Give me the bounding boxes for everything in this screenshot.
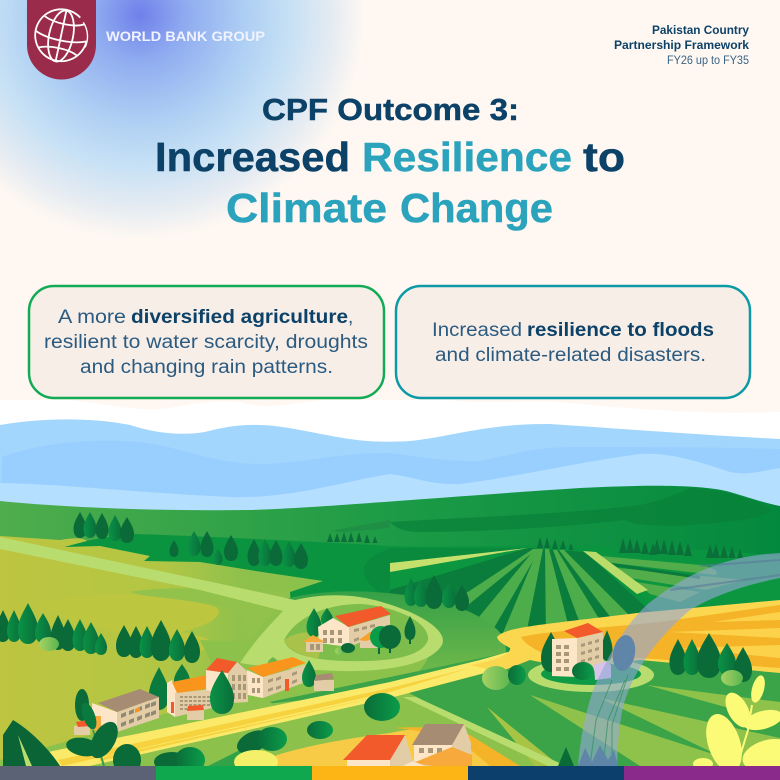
striped fan field [390, 548, 660, 640]
panel: agriculture [29, 286, 384, 398]
building: grey roof [74, 689, 159, 735]
framework label: FY26 up to FY35 [667, 53, 749, 67]
title: Change [400, 185, 553, 231]
rays [487, 685, 780, 766]
panel: agriculture: diversified agriculture [131, 307, 348, 328]
panel: agriculture: , [348, 307, 353, 328]
building: gable red roof [206, 658, 248, 703]
panel: agriculture: A more [58, 307, 126, 328]
bottom centre buildings [343, 724, 472, 766]
colour bar [0, 766, 780, 780]
icon: globe [30, 4, 93, 67]
middle green band [63, 534, 780, 640]
centre farm [303, 606, 416, 655]
light road to farm [0, 537, 443, 671]
panel: agriculture: and changing rain patterns. [80, 357, 333, 378]
sky layers [0, 419, 780, 530]
title: Climate [226, 185, 387, 231]
title: Resilience [362, 134, 572, 180]
panel: agriculture: resilient to water scarcity, droughts [44, 332, 368, 353]
framework label [614, 23, 749, 67]
white band [0, 400, 780, 520]
panel: floods: Increased [432, 320, 522, 341]
right farm [541, 623, 612, 680]
light road and bottom yellow field [260, 697, 566, 766]
bushes [154, 665, 526, 774]
lower slope fill [200, 640, 440, 720]
panel: floods: resilience to floods [527, 320, 714, 341]
buildings row [74, 657, 334, 735]
right stripes field [590, 553, 780, 612]
background glow [0, 0, 365, 240]
left field [0, 536, 323, 775]
landscape illustration [0, 400, 780, 780]
logo: World Bank tab [27, 0, 265, 80]
title: Increased [155, 134, 350, 180]
framework label: Partnership Framework [614, 38, 749, 52]
title: CPF Outcome 3: [262, 92, 519, 127]
farm plateau [284, 604, 428, 661]
water swoosh [558, 553, 780, 766]
tree line: far left [74, 512, 308, 569]
title: to [583, 134, 625, 180]
lower green [255, 650, 780, 770]
building: long orange roof [247, 657, 306, 698]
tree line: left forest [0, 603, 200, 663]
building: orange roof [167, 675, 213, 720]
panel: floods: and climate-related disasters. [435, 345, 706, 366]
hill shadow band [390, 488, 772, 532]
framework label: Pakistan Country [652, 23, 749, 37]
yellow road [48, 652, 515, 772]
farm tracks [390, 548, 528, 572]
far hill [0, 486, 780, 780]
central hill [283, 591, 510, 695]
title [155, 92, 625, 231]
tree line: distant conifers [327, 532, 743, 558]
foreground plant: yellow right [693, 674, 780, 776]
tree line: centre [404, 575, 469, 611]
yellow field [470, 600, 780, 673]
logo wordmark: WORLD BANK GROUP [106, 28, 265, 44]
field blobs [40, 594, 219, 652]
foreground plant: dark left [3, 689, 141, 776]
tree line: right [670, 633, 752, 686]
right farm ring [528, 658, 654, 692]
panel: floods [396, 286, 750, 398]
